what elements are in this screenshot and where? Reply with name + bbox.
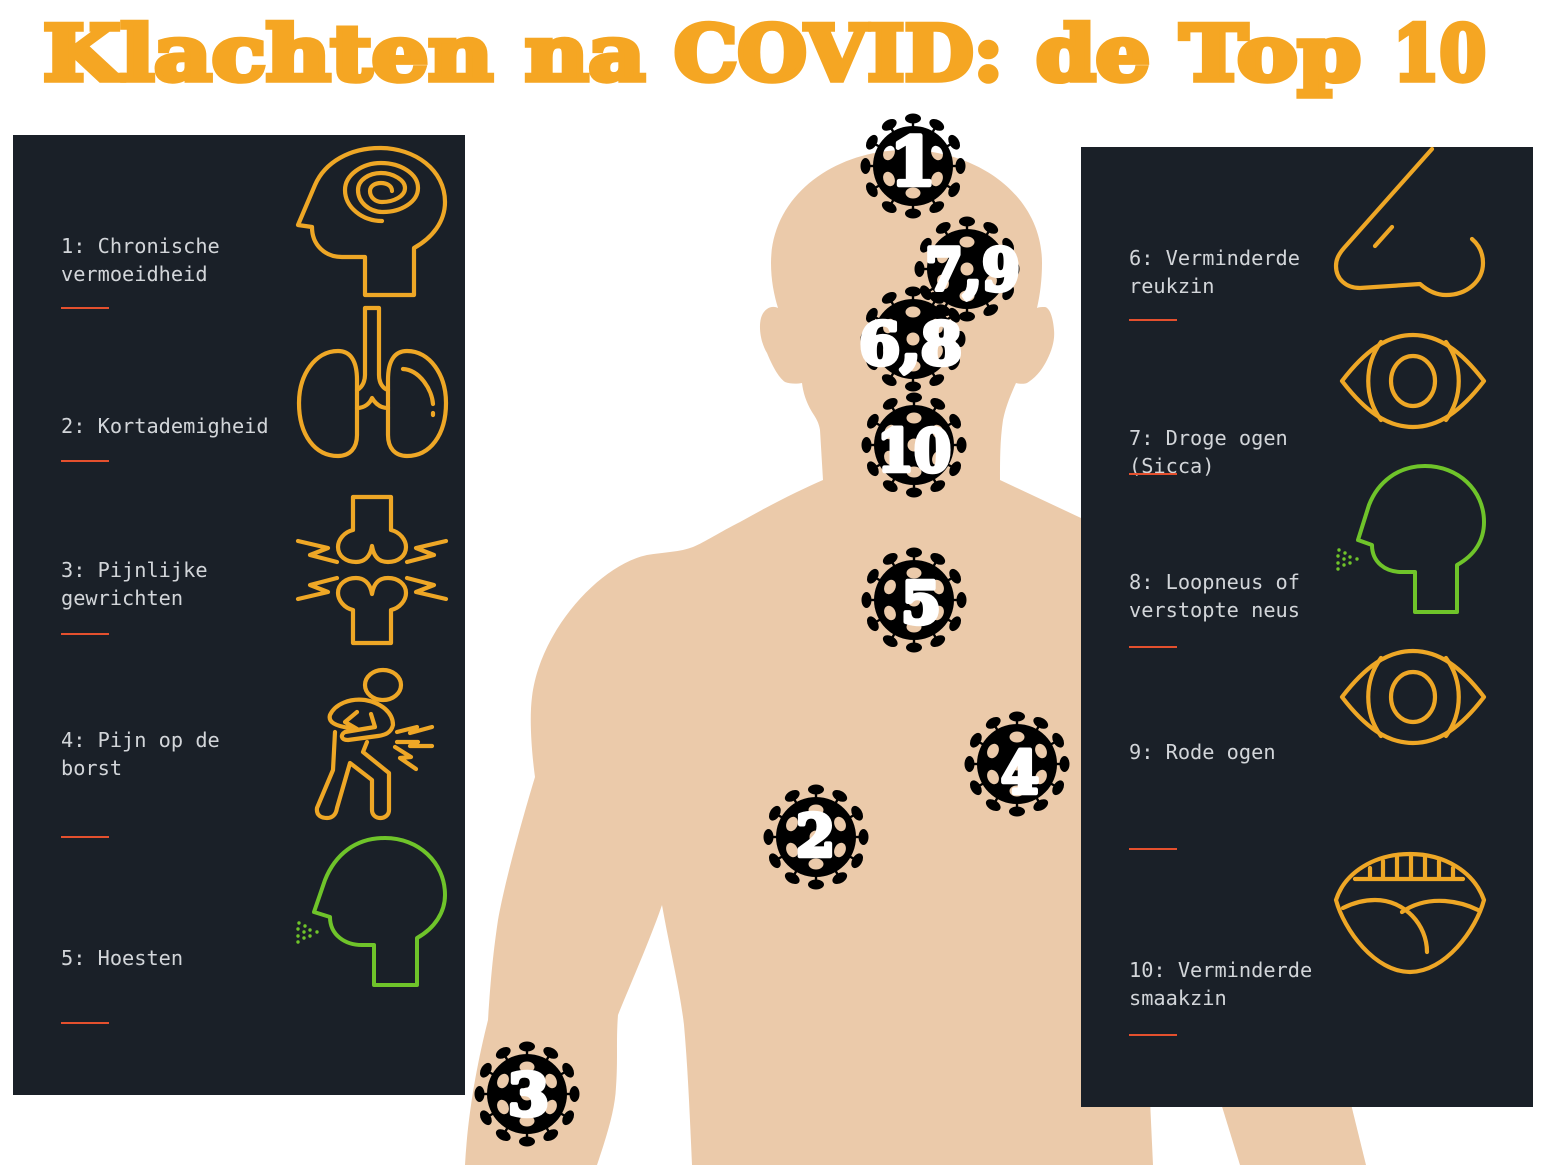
symptom 4 text: borst [61,756,122,780]
symptom 7 text: 7: Droge ogen [1129,426,1288,450]
virus marker 7,9 [914,216,1020,322]
icon: eye red [1342,651,1484,743]
symptom 8 text [1129,570,1300,648]
symptom 5 text: 5: Hoesten [61,946,183,970]
title: na [525,9,645,98]
symptom 3 text: 3: Pijnlijke [61,558,208,582]
symptom 2 text: 2: Kortademigheid [61,414,269,438]
virus marker 2 [764,784,868,890]
icon: nose [1336,149,1483,295]
symptom 6 text [1129,246,1300,321]
virus marker 5: 5 [901,569,941,637]
symptom 6 text: 6: Verminderde [1129,246,1300,270]
virus marker 5 [862,548,966,652]
symptom 1 text: vermoeidheid [61,262,208,286]
symptom 4 text [61,728,220,838]
virus marker 4: 4 [1001,739,1039,807]
symptom 3 text [61,558,208,635]
virus marker 2: 2 [796,802,835,870]
virus marker 7,9: 7,9 [925,236,1020,304]
icon: lungs [299,308,446,456]
title: Klachten [43,9,493,98]
symptom 9 text: 9: Rode ogen [1129,740,1276,764]
symptom 4 text: 4: Pijn op de [61,728,220,752]
symptom 10 text: 10: Verminderde [1129,958,1312,982]
symptom 8 text: verstopte neus [1129,598,1300,622]
symptom 10 text: smaakzin [1129,986,1227,1010]
icon: head with runny nose [1336,466,1484,612]
symptom 7 text [1129,426,1288,478]
virus marker 6,8: 6,8 [859,310,962,378]
icon: painful joint [298,497,446,643]
virus marker 10 [862,392,966,498]
title: Top [1180,9,1361,98]
symptom 1 text [61,234,220,309]
icon: eye dry [1342,335,1484,427]
virus marker 1 [860,114,966,218]
symptom 7 text: (Sicca) [1129,454,1214,478]
icon: head with spiral [298,148,445,295]
virus marker 4 [964,712,1070,816]
symptom 10 text [1129,958,1312,1036]
virus marker 6,8 [859,286,966,392]
icon: tongue and mouth [1336,854,1484,972]
symptom 1 text: 1: Chronische [61,234,220,258]
title [43,9,1486,98]
icon: person with chest pain [317,670,432,818]
symptom 8 text: 8: Loopneus of [1129,570,1300,594]
symptom 5 text [61,946,183,1024]
virus marker 1: 1 [890,123,936,201]
symptom 3 text: gewrichten [61,586,183,610]
virus marker 3: 3 [508,1061,549,1129]
human body silhouette [465,150,1366,1165]
title: de [1036,9,1150,98]
panel: left symptoms 1-5 [13,135,465,1095]
panel: right symptoms 6-10 [1081,147,1533,1107]
title: 10 [1393,9,1486,98]
virus marker 10: 10 [877,417,951,485]
title: COVID: [674,9,1003,98]
icon: coughing head [296,838,445,985]
symptom 6 text: reukzin [1129,274,1214,298]
virus marker 3 [474,1042,580,1146]
